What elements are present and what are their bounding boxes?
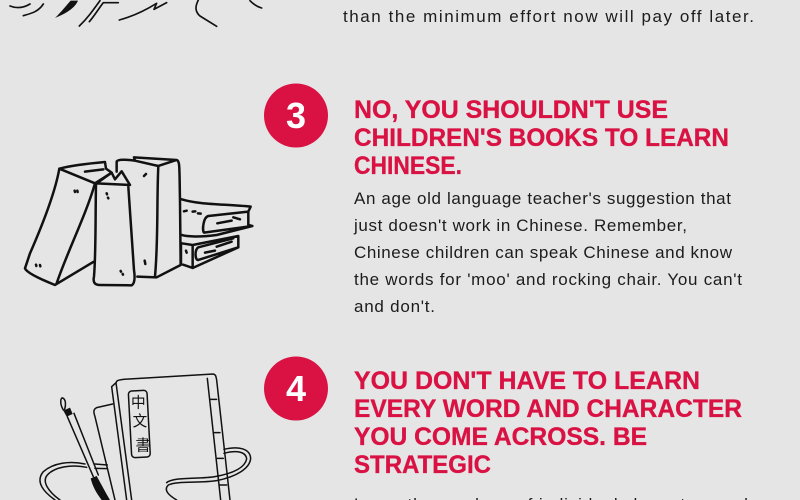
- heading: tip 3: NO, YOU SHOULDN'T USE: [354, 96, 668, 124]
- lying book top: [182, 199, 252, 236]
- heading: tip 4: STRATEGIC: [354, 451, 491, 479]
- icon: stack of books: [25, 157, 252, 285]
- heading: tip 4: YOU DON'T HAVE TO LEARN: [354, 367, 700, 395]
- heading: tip 3: CHILDREN'S BOOKS TO LEARN: [354, 124, 729, 152]
- badge: number 3: 3: [286, 95, 306, 136]
- middle book: [94, 171, 135, 285]
- text: tip 2 closing line: than the minimum effort now will pay off later.: [343, 7, 754, 26]
- icon: Chinese book with brush: 中: [131, 394, 146, 411]
- book cover: [112, 374, 230, 500]
- icon: Chinese book with brush: 書: [135, 438, 151, 455]
- title label: [128, 390, 150, 458]
- heading: tip 3: CHINESE.: [354, 152, 462, 180]
- badge: number 4: 4: [286, 368, 306, 409]
- text block: tip 3 body: the words for 'moo' and rocking chair. You can't: [354, 270, 742, 289]
- brush: [61, 398, 98, 477]
- badge: number 3: [264, 84, 328, 148]
- icon: Chinese book with brush: 文: [133, 413, 148, 430]
- leaning book: [25, 162, 112, 285]
- heading: tip 4: EVERY WORD AND CHARACTER: [354, 395, 742, 423]
- lying book bottom: [181, 236, 238, 268]
- badge: number 4: [264, 356, 328, 420]
- heading: tip 3: [354, 96, 729, 180]
- icon: Chinese book with brush: [40, 374, 251, 500]
- heading: tip 4: [354, 367, 742, 479]
- back pages: [94, 404, 115, 500]
- icon: mountain illustration bottom edge: [10, 0, 262, 26]
- text block: tip 3 body: just doesn't work in Chinese. Remember,: [353, 216, 687, 235]
- text block: tip 3 body: Chinese children can speak Chinese and know: [354, 243, 733, 262]
- heading: tip 4: YOU COME ACROSS. BE: [354, 423, 647, 451]
- ribbon: [40, 448, 251, 500]
- text block: tip 3 body: [353, 189, 742, 316]
- text block: tip 3 body: An age old language teacher's suggestion that: [354, 189, 731, 208]
- text block: tip 3 body: and don't.: [354, 297, 435, 316]
- upright book: [117, 157, 181, 277]
